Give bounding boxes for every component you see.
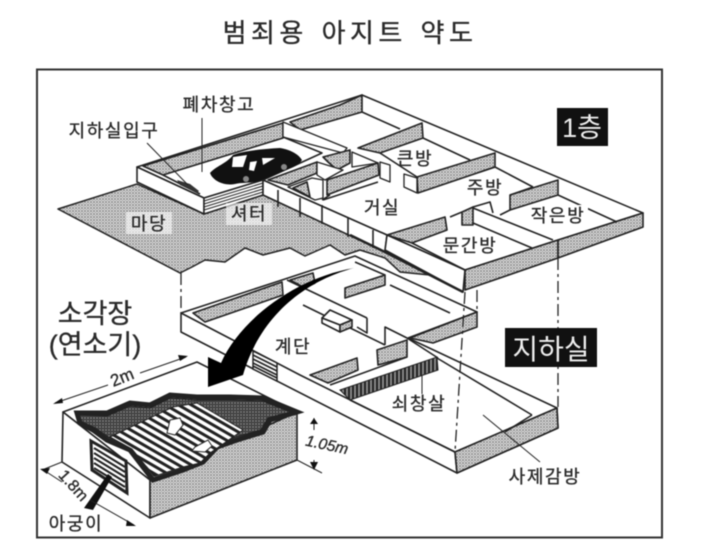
dimension labels: 1.05m [304, 433, 350, 458]
badge: first floor [557, 108, 608, 146]
labels: 큰방 [397, 149, 433, 169]
labels: 계단 [275, 337, 311, 357]
front wall face [385, 235, 465, 292]
crate [322, 310, 352, 332]
labels: 쇠창살 [392, 394, 446, 414]
panel: incinerator [62, 362, 297, 518]
left wall with openings [263, 180, 387, 252]
arrow: to incinerator [208, 268, 354, 387]
entrance hatch [177, 180, 199, 193]
firebox pointer [84, 474, 112, 510]
labels: 마당 [131, 214, 167, 234]
frame [37, 70, 662, 538]
labels: 주방 [467, 178, 503, 198]
labels: 문간방 [443, 236, 497, 256]
firebox door [91, 441, 127, 493]
garage walls [137, 95, 362, 214]
car [210, 148, 302, 184]
labels: 셔터 [231, 204, 267, 224]
dimension labels: 1.8m [55, 467, 91, 505]
dimension labels: 2m [108, 364, 137, 391]
incinerator box [63, 362, 297, 480]
labels: 작은방 [531, 206, 585, 226]
heading: incinerator: 소각장 [58, 299, 132, 329]
grate rim [77, 395, 297, 480]
callout lines [147, 118, 540, 462]
labels: 거실 [364, 198, 400, 218]
labels: 지하실입구 [69, 121, 159, 141]
yard [58, 184, 463, 292]
dashed guide lines [181, 258, 558, 452]
badge: basement: 지하실 [512, 334, 590, 365]
wavy cut edge [350, 235, 463, 292]
basement inner walls [287, 262, 532, 452]
badge: first floor: 1층 [562, 113, 602, 143]
heading: incinerator [49, 299, 141, 360]
labels: 폐차창고 [183, 95, 255, 115]
title: 범죄용 아지트 약도 [223, 18, 477, 48]
floor plate [137, 95, 643, 270]
grate interior [79, 398, 291, 476]
panel: first floor [58, 95, 643, 292]
inner walls [268, 112, 617, 270]
labels [49, 95, 588, 534]
dimension labels [55, 364, 350, 505]
prison bars [340, 357, 438, 400]
front bands [465, 240, 558, 290]
basement wall bands [193, 273, 558, 473]
labels: 아궁이 [49, 514, 103, 534]
badge: basement [505, 328, 597, 367]
panel: basement plan [181, 256, 558, 473]
labels: 사제감방 [509, 467, 581, 487]
dimension arrows [40, 355, 322, 526]
basement floor outline [181, 256, 558, 473]
stairs [253, 351, 277, 381]
heading: incinerator: (연소기) [49, 330, 141, 360]
